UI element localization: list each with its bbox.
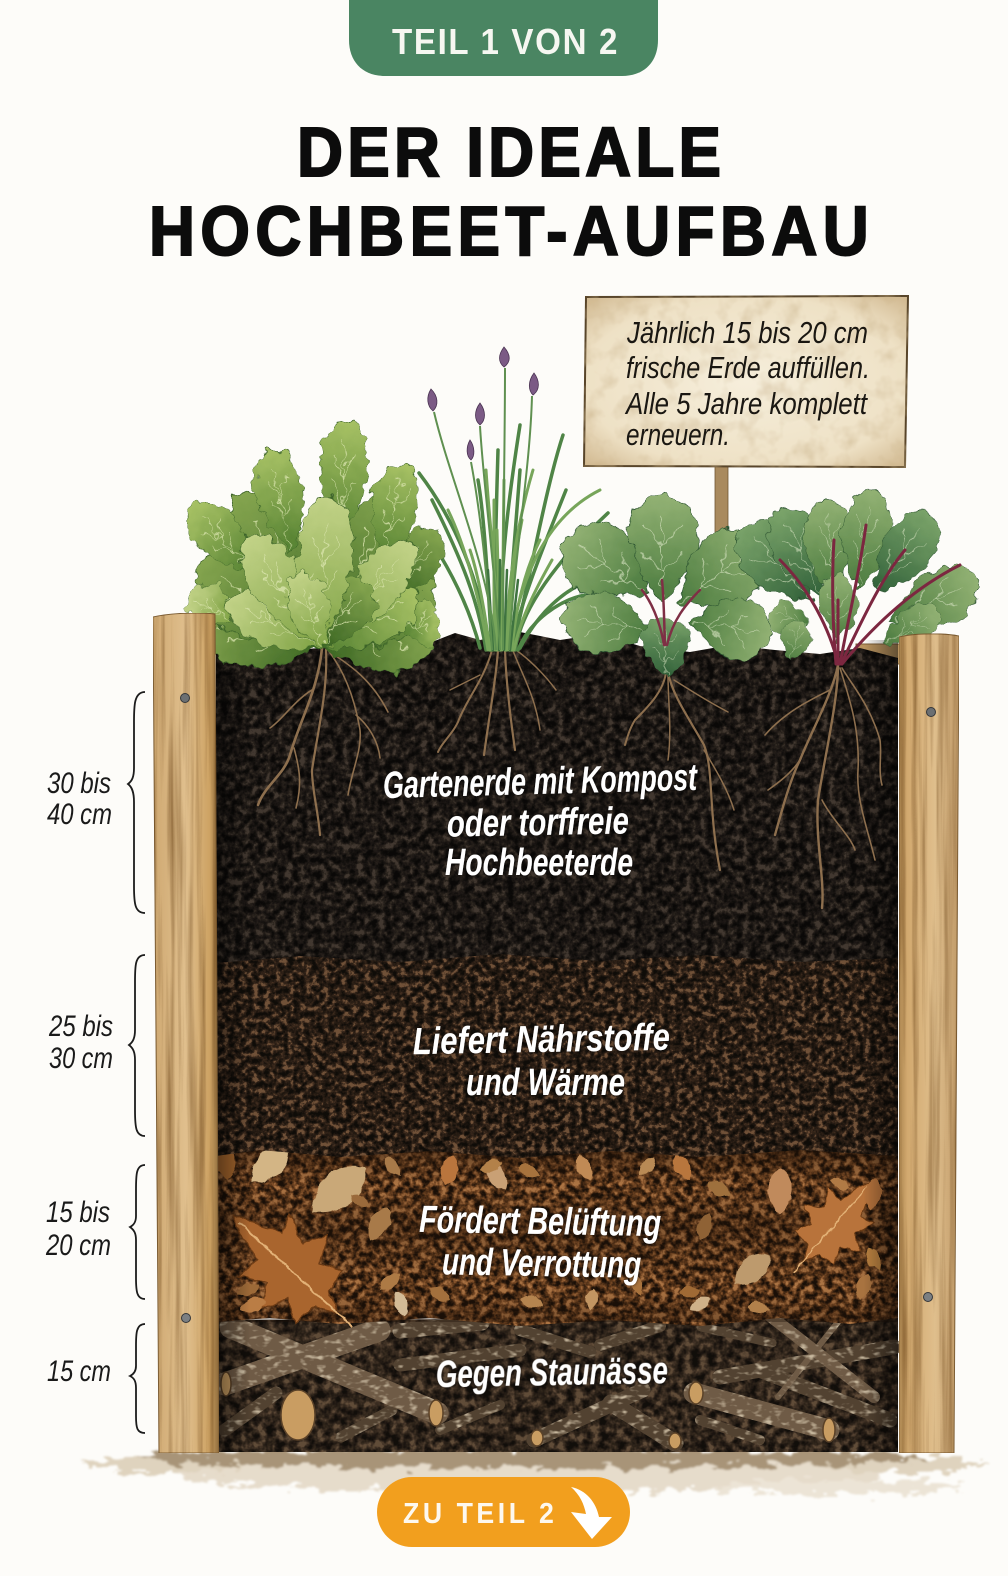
layer 2: compost: [216, 953, 898, 1158]
layer caption: leaves: Fördert Belüftung: [419, 1199, 661, 1245]
sign with maintenance note: [584, 296, 908, 467]
screw: [182, 1314, 190, 1322]
height label: branch layer: 15 cm: [47, 1355, 111, 1388]
title: HOCHBEET-AUFBAU: [149, 192, 869, 271]
ground shadow and dirt: [85, 1448, 985, 1494]
sign text: frische Erde auffüllen.: [626, 350, 870, 385]
inner shading next to posts: [216, 640, 898, 1452]
top banner: part indicator: [349, 0, 658, 76]
chard stems: [780, 525, 960, 664]
height label: leaf layer: 20 cm: [45, 1229, 111, 1262]
sign text: [624, 315, 870, 452]
roots: beet: [625, 672, 734, 870]
button: to part 2: [377, 1477, 630, 1547]
left wooden post: [153, 613, 219, 1453]
button: to part 2: ZU TEIL 2: [403, 1497, 554, 1529]
beet stalks: [642, 580, 700, 645]
layer caption: leaves: [419, 1199, 661, 1287]
chive flower buds: [428, 347, 538, 460]
height label: compost layer: 25 bis: [48, 1010, 113, 1043]
chard leaves: [722, 487, 989, 665]
branches drawn across the layer: [225, 1312, 894, 1443]
height label: top layer: 40 cm: [47, 798, 112, 831]
sign post: [715, 465, 728, 543]
height label: compost layer: [48, 955, 145, 1136]
height label: top layer: 30 bis: [47, 767, 111, 800]
height label: compost layer: 30 cm: [49, 1042, 113, 1075]
plant: chives: [419, 347, 608, 650]
roots: [258, 648, 882, 908]
plant: beet: [546, 495, 782, 678]
height label: top layer: [47, 692, 145, 913]
layer caption: garden soil: Gartenerde mit Kompost: [383, 757, 698, 807]
chive blades: [419, 425, 608, 650]
roots: chard: [765, 665, 882, 908]
height label: branch layer: [47, 1324, 145, 1433]
back rail right: [856, 644, 902, 664]
right wooden post: [899, 634, 959, 1453]
lettuce inner leaves: [181, 495, 445, 672]
roots: lettuce: [258, 648, 388, 835]
lettuce outer leaves: [176, 417, 453, 683]
screw: [180, 694, 190, 702]
chive flower stems: [434, 368, 532, 650]
layer caption: compost: Liefert Nährstoffe: [412, 1017, 670, 1063]
screw: [926, 708, 936, 716]
back rail left: [212, 630, 258, 654]
plant: chard with red stems: [722, 487, 989, 665]
screw: [924, 1292, 932, 1302]
top banner: part indicator: TEIL 1 VON 2: [392, 23, 617, 62]
layer caption: branches: Gegen Staunässe: [436, 1350, 668, 1396]
sign text: erneuern.: [626, 417, 730, 452]
roots: chives: [438, 648, 556, 755]
soil layers: [199, 632, 901, 1452]
log cross-sections: [221, 1372, 835, 1449]
layer 3: leaves and wood chips: [199, 1137, 901, 1363]
layer 1: garden soil: [216, 632, 898, 963]
layer caption: leaves: und Verrottung: [442, 1241, 641, 1287]
height label: leaf layer: 15 bis: [46, 1196, 110, 1229]
layer caption: compost: und Wärme: [466, 1062, 625, 1104]
darkening band for depth: [216, 1150, 898, 1322]
layer 4: branches: [216, 1312, 898, 1452]
title: [149, 113, 869, 271]
layer caption: compost: [412, 1017, 670, 1104]
sign text: Alle 5 Jahre komplett: [624, 386, 868, 421]
title: DER IDEALE: [297, 113, 721, 192]
layer caption: garden soil: oder torffreie: [447, 800, 629, 846]
height label: leaf layer: [45, 1165, 145, 1299]
plant: lettuce: [176, 417, 453, 683]
sign text: Jährlich 15 bis 20 cm: [626, 315, 868, 350]
beet leaves: [546, 495, 782, 678]
layer caption: garden soil: Hochbeeterde: [445, 842, 633, 884]
scattered leaves: [199, 1137, 901, 1363]
layer caption: garden soil: [383, 757, 698, 884]
icon: curved arrow down: [571, 1487, 612, 1539]
